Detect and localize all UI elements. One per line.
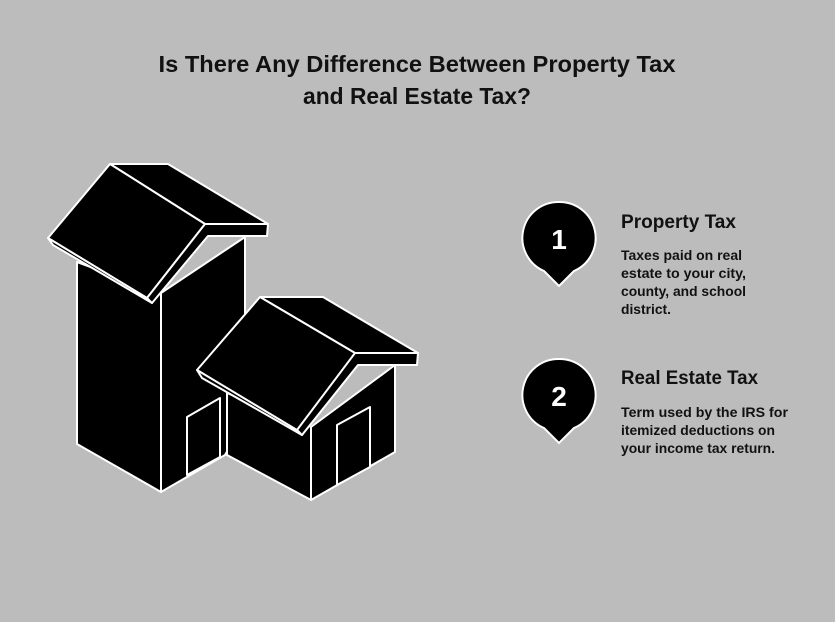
title: Is There Any Difference Between Property Tax <box>158 51 676 77</box>
body 2 <box>621 404 789 456</box>
title: and Real Estate Tax? <box>303 83 531 109</box>
small house <box>197 297 418 500</box>
item 1 <box>522 202 746 317</box>
heading 2: Real Estate Tax <box>621 368 758 389</box>
pin 2 <box>522 359 596 443</box>
body 1: Taxes paid on real <box>621 247 742 263</box>
pin 2: 2 <box>551 381 567 412</box>
body 1: estate to your city, <box>621 265 746 281</box>
item 2 <box>522 359 789 456</box>
body 2: Term used by the IRS for <box>621 404 789 420</box>
pin 1: 1 <box>551 224 567 255</box>
pin 1 <box>522 202 596 286</box>
illustration: houses <box>48 164 418 500</box>
body 1: district. <box>621 301 671 317</box>
body 2: itemized deductions on <box>621 422 775 438</box>
title <box>158 51 676 109</box>
body 2: your income tax return. <box>621 440 775 456</box>
body 1 <box>621 247 746 317</box>
body 1: county, and school <box>621 283 746 299</box>
tall house <box>48 164 268 492</box>
heading 1: Property Tax <box>621 212 736 233</box>
